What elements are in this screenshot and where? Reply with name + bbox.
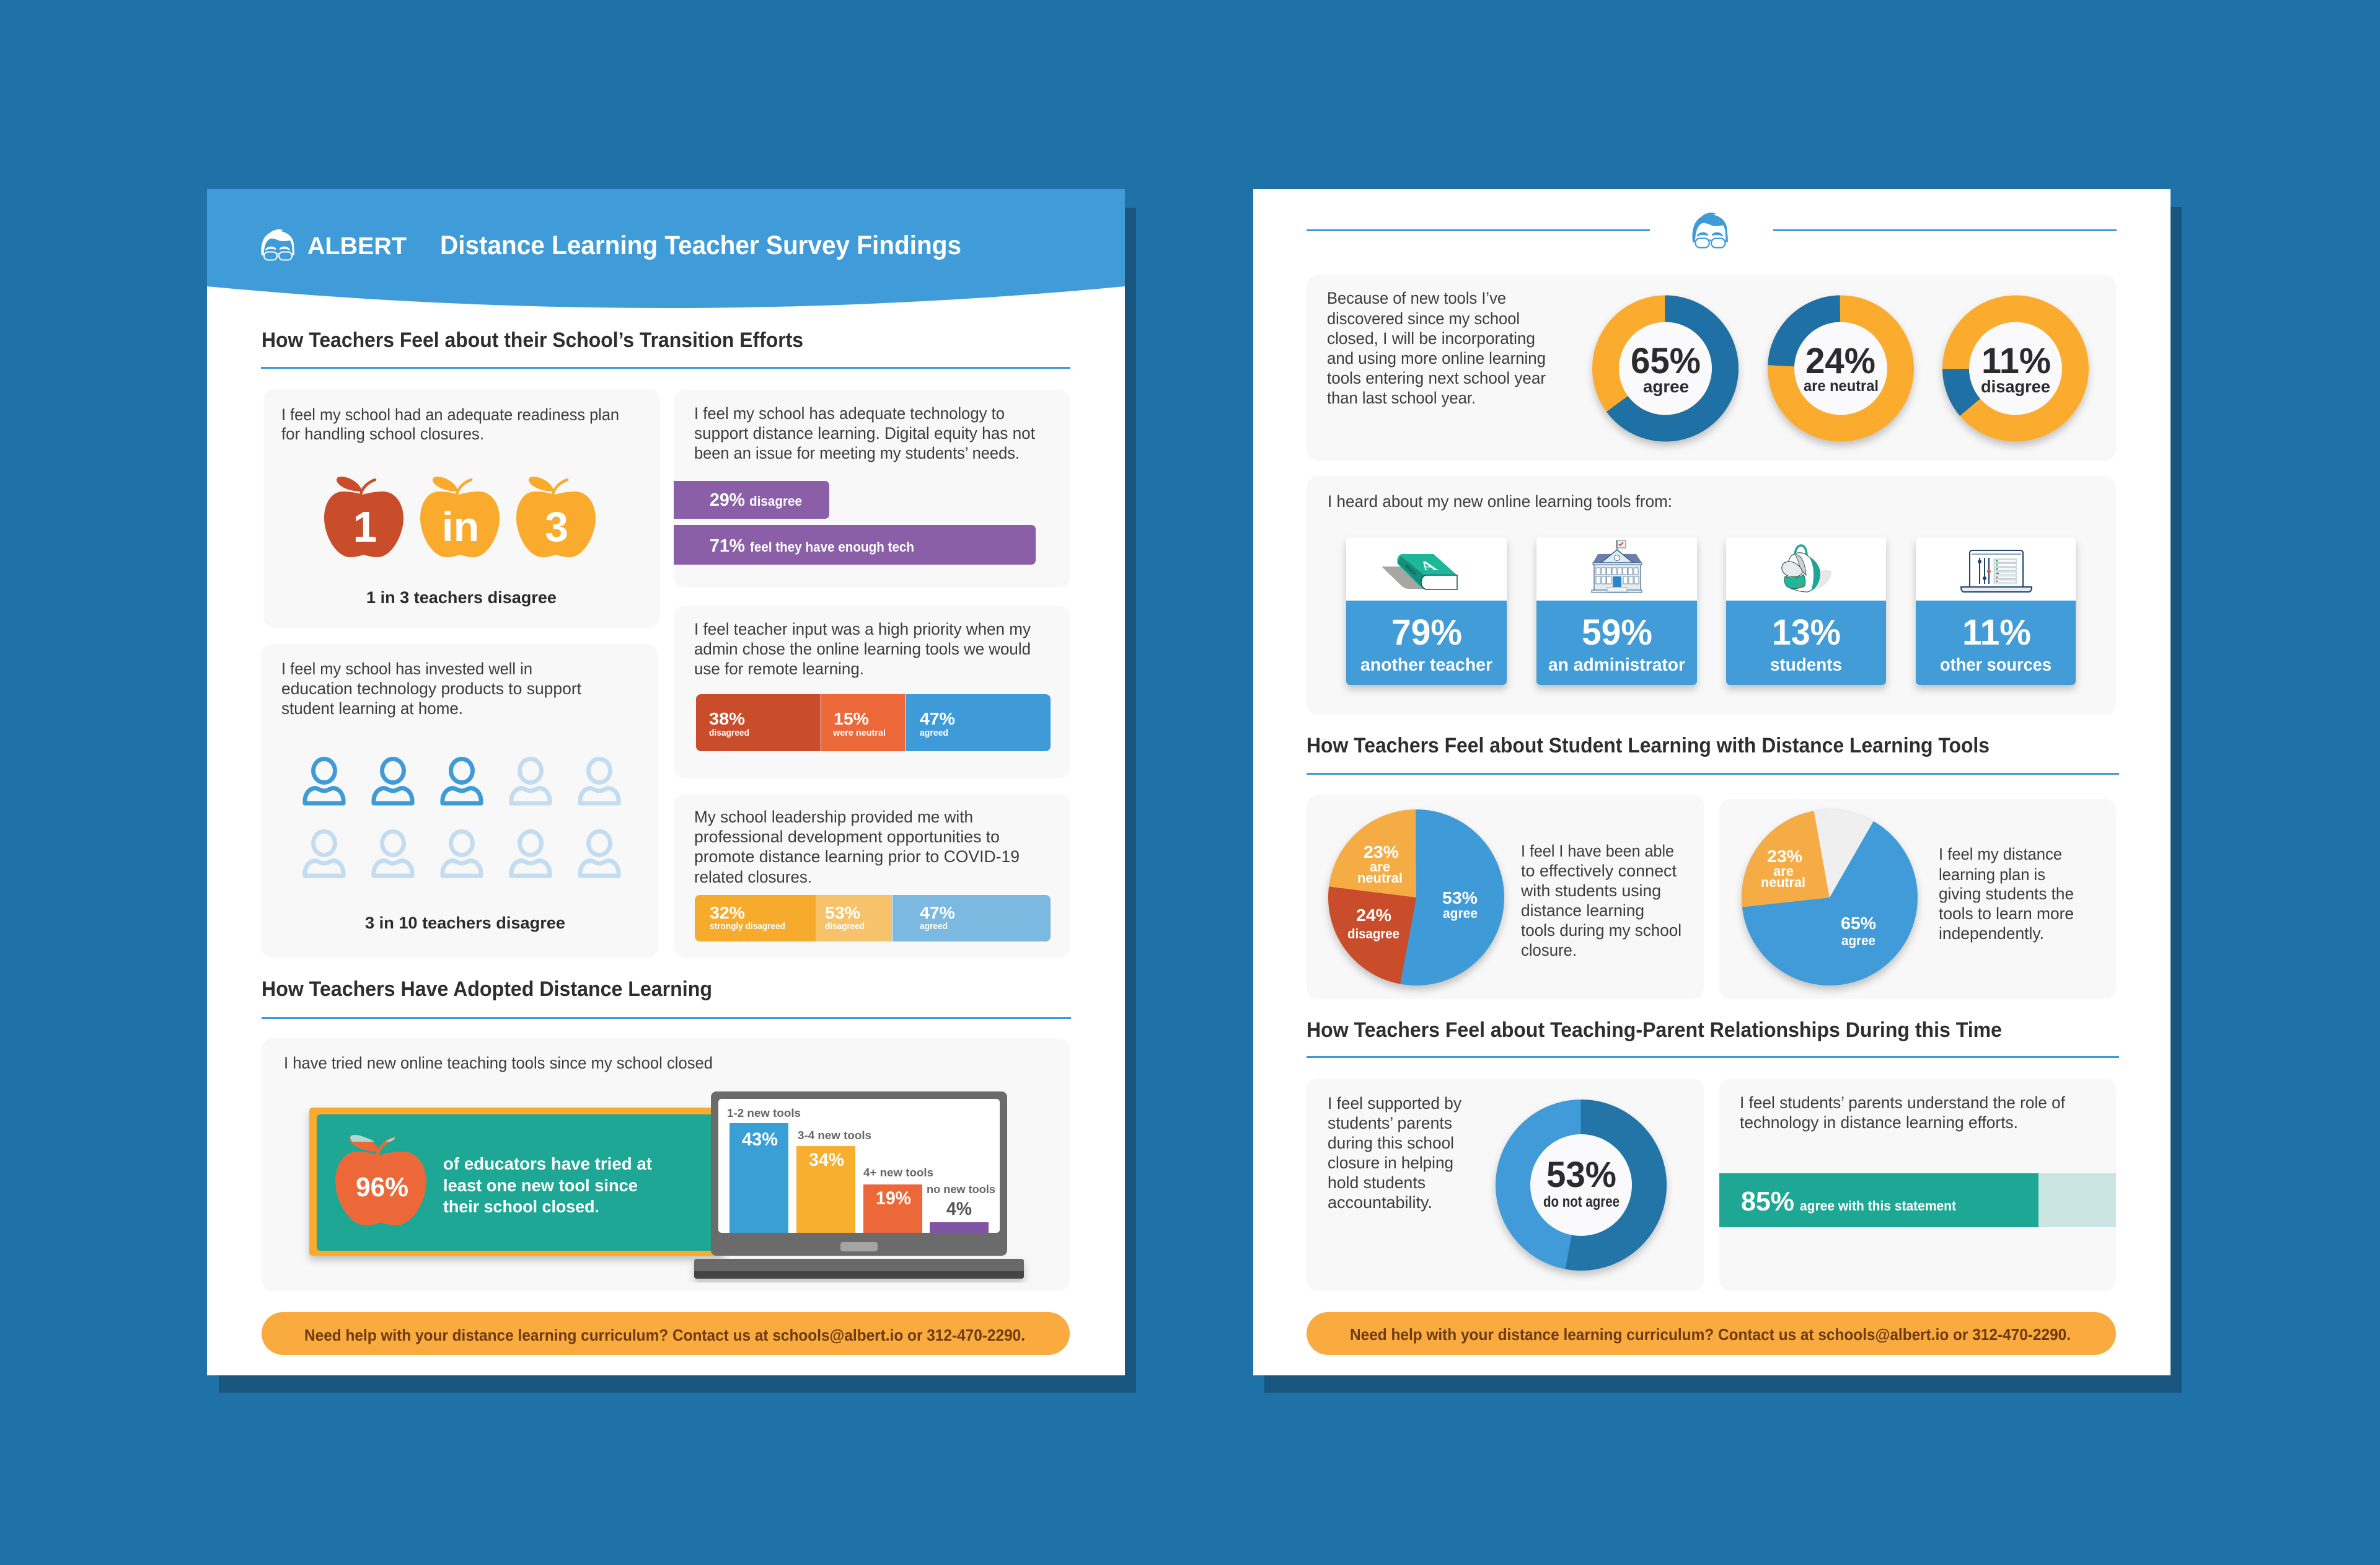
card: other sources: other sources — [1940, 655, 2052, 675]
icon: school building — [1592, 540, 1642, 593]
donut: 24% are neutral: are neutral — [1804, 377, 1879, 395]
icon: 1 in 3 apples — [324, 477, 596, 557]
question text: related closures. — [694, 868, 812, 886]
question text: for handling school closures. — [281, 425, 484, 443]
stacked bar: agreed — [920, 921, 948, 932]
stacked bar: 38% — [709, 709, 745, 728]
question text: giving students the — [1939, 884, 2074, 903]
question text: I feel I have been able — [1521, 842, 1674, 860]
pie chart: 23% — [1767, 847, 1802, 866]
question text: closure in helping — [1328, 1153, 1453, 1172]
laptop bar chart: 4% — [946, 1199, 972, 1219]
question text — [1520, 842, 1681, 959]
question text: My school leadership provided me with — [694, 808, 973, 826]
title: Distance Learning Teacher Survey Findings — [440, 231, 961, 260]
top divider with logo — [1307, 213, 2117, 247]
card: students: students — [1770, 655, 1842, 675]
stacked bar: disagreed — [825, 921, 865, 932]
panel: teacher input — [674, 606, 1070, 778]
panel: parents understand — [1719, 1078, 2116, 1291]
stacked bar — [696, 694, 1051, 751]
question text: been an issue for meeting my students’ needs. — [694, 444, 1020, 462]
question text: closed, I will be incorporating — [1327, 329, 1535, 348]
question text: I feel my school has adequate technology to — [694, 404, 1005, 423]
heading: adoption: How Teachers Have Adopted Distance Learning — [262, 977, 712, 1001]
donut: 11% disagree: 11% — [1981, 341, 2051, 381]
pie chart: 65% — [1841, 914, 1876, 933]
card: an administrator: an administrator — [1548, 655, 1685, 675]
laptop bar chart — [694, 1091, 1024, 1279]
question text: students’ parents — [1328, 1114, 1452, 1132]
donut: 53% do not agree: 53% — [1546, 1155, 1616, 1195]
question text: admin chose the online learning tools we would — [694, 640, 1031, 658]
pie chart: agree — [1443, 906, 1478, 921]
question text: to effectively connect — [1521, 862, 1677, 880]
panel: technology — [674, 390, 1070, 588]
question text — [694, 808, 1020, 886]
question text: education technology products to support — [281, 679, 581, 698]
icon: book: INDEX — [1404, 564, 1417, 576]
question text: discovered since my school — [1327, 309, 1520, 328]
icon: laptop — [1961, 550, 2032, 592]
callout text — [443, 1154, 652, 1216]
donut: 11% disagree — [1931, 284, 2100, 452]
pie chart: are — [1773, 863, 1794, 879]
callout text: their school closed. — [443, 1197, 599, 1216]
pie chart: 53% — [1442, 888, 1478, 907]
donut: 24% are neutral — [1768, 295, 1914, 441]
question text: distance learning — [1521, 901, 1644, 920]
callout text: least one new tool since — [443, 1176, 638, 1195]
icon: backpack — [1782, 545, 1831, 592]
panel: professional development — [674, 794, 1070, 958]
progress bar: 85% — [1719, 1173, 2116, 1227]
donut: 65% agree: 65% — [1631, 341, 1701, 381]
question text: accountability. — [1328, 1193, 1432, 1212]
question text: use for remote learning. — [694, 659, 864, 678]
question text: tools entering next school year — [1327, 369, 1546, 387]
panel: readiness plan — [263, 389, 660, 628]
question text — [1328, 1094, 1461, 1212]
question text: I feel teacher input was a high priority when my — [694, 620, 1031, 638]
stat label: 3 in 10 teachers disagree — [365, 914, 565, 932]
pie chart: neutral — [1761, 875, 1805, 890]
question text: promote distance learning prior to COVID-19 — [694, 847, 1020, 866]
laptop bar chart: 34% — [809, 1150, 844, 1170]
question text — [281, 405, 619, 443]
stacked bar: 47% — [920, 709, 955, 728]
question text: I feel supported by — [1328, 1094, 1461, 1113]
stacked bar: were neutral — [832, 728, 886, 738]
question text: student learning at home. — [281, 699, 463, 718]
stat label: 1 in 3 teachers disagree — [366, 588, 557, 607]
card: another teacher: another teacher — [1360, 655, 1492, 675]
icon: 1 in 3 apples: in — [442, 503, 479, 550]
question text — [1327, 289, 1546, 407]
pie chart — [1328, 809, 1504, 985]
card: other sources — [1916, 537, 2076, 685]
donut: 53% do not agree — [1496, 1100, 1667, 1271]
pie chart: disagree — [1347, 926, 1399, 941]
footer call to action — [262, 1312, 1070, 1355]
stacked bar: disagreed — [709, 728, 749, 738]
panel: heard about tools — [1307, 476, 2116, 715]
footer call to action — [1307, 1312, 2116, 1355]
laptop bar chart: 4+ new tools — [863, 1166, 933, 1179]
bar: 29% disagree: 29% — [710, 490, 745, 510]
card: another teacher — [1346, 537, 1507, 685]
question text: hold students — [1328, 1173, 1426, 1192]
question text: technology in distance learning efforts. — [1740, 1113, 2018, 1132]
donut: 24% are neutral: 24% — [1805, 341, 1875, 381]
laptop bar chart: no new tools — [927, 1183, 995, 1196]
icon array: 3 of 10 people — [305, 759, 619, 876]
stacked bar: 32% — [710, 903, 745, 922]
brand name: ALBERT — [307, 233, 407, 260]
icon: apple 96% — [335, 1135, 426, 1225]
logo icon — [261, 229, 294, 260]
question text: professional development opportunities to — [694, 827, 1000, 846]
laptop bar chart: 3-4 new tools — [798, 1129, 871, 1142]
panel: learning independently — [1719, 799, 2116, 999]
question text: than last school year. — [1327, 389, 1476, 407]
panel: new online tools — [262, 1038, 1070, 1291]
question text: learning plan is — [1939, 865, 2045, 884]
question text: I feel my school had an adequate readiness plan — [281, 405, 619, 424]
header banner — [207, 189, 1125, 308]
panel: invested in edtech — [261, 644, 658, 958]
question text — [281, 659, 581, 718]
laptop bar chart: 43% — [742, 1129, 778, 1150]
pie chart: are — [1370, 859, 1390, 875]
pie chart — [1742, 809, 1918, 985]
card: another teacher: 79% — [1391, 612, 1462, 653]
question text: I feel my distance — [1939, 845, 2062, 863]
footer call to action: Need help with your distance learning curriculum? Contact us at schools@albert.io or 312-470-2290. — [1350, 1325, 2071, 1344]
question text: and using more online learning — [1327, 349, 1546, 368]
progress bar: 85%: agree with this statement — [1800, 1198, 1957, 1214]
donut: 65% agree — [1592, 295, 1739, 441]
question text: tools to learn more — [1939, 904, 2074, 923]
progress bar: 85%: 85% — [1741, 1186, 1794, 1217]
question text: tools during my school — [1521, 921, 1681, 940]
bar: 29% disagree: disagree — [749, 493, 802, 509]
stacked bar: strongly disagreed — [710, 921, 785, 932]
question text: I feel students’ parents understand the role of — [1740, 1093, 2065, 1112]
stacked bar — [695, 895, 1051, 941]
question text: during this school — [1328, 1134, 1454, 1152]
question text: with students using — [1520, 881, 1661, 900]
heading: student learning: How Teachers Feel about Student Learning with Distance Learning Tools — [1307, 734, 1990, 757]
pie chart: neutral — [1357, 870, 1403, 886]
bar: 71% enough tech — [674, 525, 1036, 565]
page 2 — [1253, 189, 2182, 1393]
stacked bar: 47% — [920, 903, 955, 922]
question text: I heard about my new online learning tools from: — [1328, 492, 1672, 511]
donut: 11% disagree: disagree — [1981, 377, 2050, 396]
icon: book: A — [1415, 559, 1442, 573]
icon: apple 96%: 96% — [356, 1172, 408, 1202]
question text — [1740, 1093, 2065, 1132]
question text: Because of new tools I’ve — [1327, 289, 1506, 307]
footer call to action: Need help with your distance learning curriculum? Contact us at schools@albert.io or 312-470-2290. — [304, 1326, 1025, 1344]
card: students: 13% — [1772, 612, 1841, 653]
question text: independently. — [1939, 924, 2044, 943]
card: an administrator — [1536, 537, 1697, 685]
pie chart: agree — [1841, 933, 1875, 948]
callout text: of educators have tried at — [443, 1154, 652, 1173]
question text — [694, 404, 1035, 462]
question text: closure. — [1521, 941, 1577, 959]
icon: 1 in 3 apples: 1 — [353, 503, 377, 551]
panel: parent support — [1307, 1078, 1704, 1291]
card: other sources: 11% — [1962, 612, 2031, 653]
donut: 65% agree: agree — [1643, 377, 1689, 396]
stacked bar: 53% — [825, 903, 860, 922]
chalkboard callout — [309, 1108, 725, 1256]
question text: I feel my school has invested well in — [281, 659, 532, 678]
bar: 71% enough tech: 71% — [710, 536, 745, 556]
stacked bar: 15% — [834, 709, 869, 728]
panel: next-year adoption — [1307, 275, 2116, 461]
pie chart: 24% — [1356, 906, 1391, 925]
icon: book — [1382, 554, 1457, 589]
card: students — [1726, 537, 1886, 685]
pie chart: 23% — [1364, 842, 1399, 862]
donut: 53% do not agree: do not agree — [1543, 1193, 1620, 1210]
bar: 29% disagree — [674, 481, 829, 519]
icon: 1 in 3 apples: 3 — [545, 503, 568, 550]
stacked bar: agreed — [920, 728, 948, 738]
question text: I have tried new online teaching tools since my school closed — [284, 1054, 713, 1072]
laptop bar chart: 19% — [876, 1188, 911, 1209]
question text — [1939, 845, 2074, 943]
heading: transition efforts: How Teachers Feel about their School’s Transition Efforts — [262, 328, 803, 352]
card: an administrator: 59% — [1582, 612, 1652, 653]
laptop bar chart: 1-2 new tools — [727, 1107, 801, 1119]
question text — [694, 620, 1031, 678]
bar: 71% enough tech: feel they have enough tech — [750, 539, 914, 555]
question text: support distance learning. Digital equity has not — [694, 424, 1035, 443]
page 1 — [207, 189, 1136, 1393]
panel: connect with students — [1307, 795, 1704, 999]
heading: parent relationships: How Teachers Feel about Teaching-Parent Relationships During this Time — [1307, 1018, 2002, 1042]
